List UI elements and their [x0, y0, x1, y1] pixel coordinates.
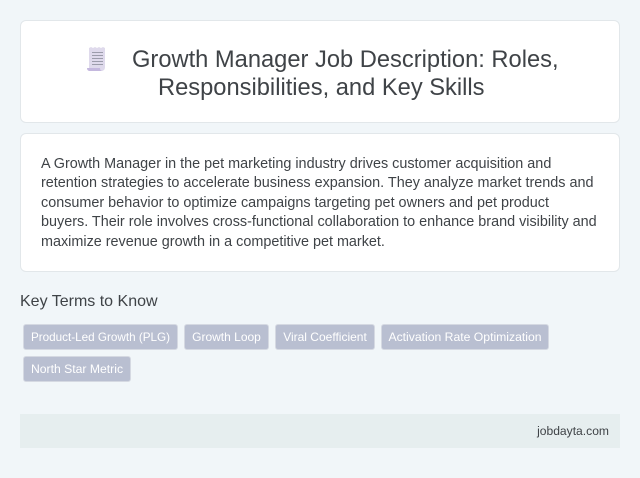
- text block: description: retention strategies to accelerate business expansion. They analyze market trends and: [41, 175, 594, 191]
- tag: Product-Led Growth (PLG): Product-Led Growth (PLG): [31, 331, 170, 344]
- text block: description: buyers. Their role involves cross-functional collaboration to enhance brand visibility and: [41, 214, 597, 230]
- title: Growth Manager Job Description: Roles,: [132, 47, 559, 73]
- footer bar: [20, 414, 620, 448]
- panel: title card: [20, 20, 620, 123]
- panel: key term tags: [23, 324, 549, 382]
- tag: North Star Metric: [23, 356, 131, 382]
- heading: key terms: Key Terms to Know: [20, 293, 158, 310]
- text block: description: A Growth Manager in the pet marketing industry drives customer acquisition and: [41, 156, 551, 172]
- tag: Product-Led Growth (PLG): [23, 324, 178, 350]
- icon: document scroll: [87, 47, 105, 71]
- panel: description: [20, 133, 620, 272]
- text block: description: [41, 156, 597, 250]
- footer text: jobdayta.com: [537, 424, 609, 438]
- title: Responsibilities, and Key Skills: [158, 75, 485, 101]
- tag: Activation Rate Optimization: [381, 324, 549, 350]
- tag: Viral Coefficient: [275, 324, 375, 350]
- tag: Viral Coefficient: Viral Coefficient: [283, 330, 367, 344]
- tag: Growth Loop: Growth Loop: [192, 330, 261, 344]
- tag: Activation Rate Optimization: Activation Rate Optimization: [388, 330, 542, 344]
- tag: North Star Metric: North Star Metric: [31, 362, 123, 376]
- text block: description: consumer behavior to optimize campaigns targeting pet owners and pet product: [41, 195, 549, 211]
- title: [132, 47, 559, 101]
- text block: description: maximize revenue growth in a competitive pet market.: [41, 234, 385, 250]
- tag: Growth Loop: [184, 324, 269, 350]
